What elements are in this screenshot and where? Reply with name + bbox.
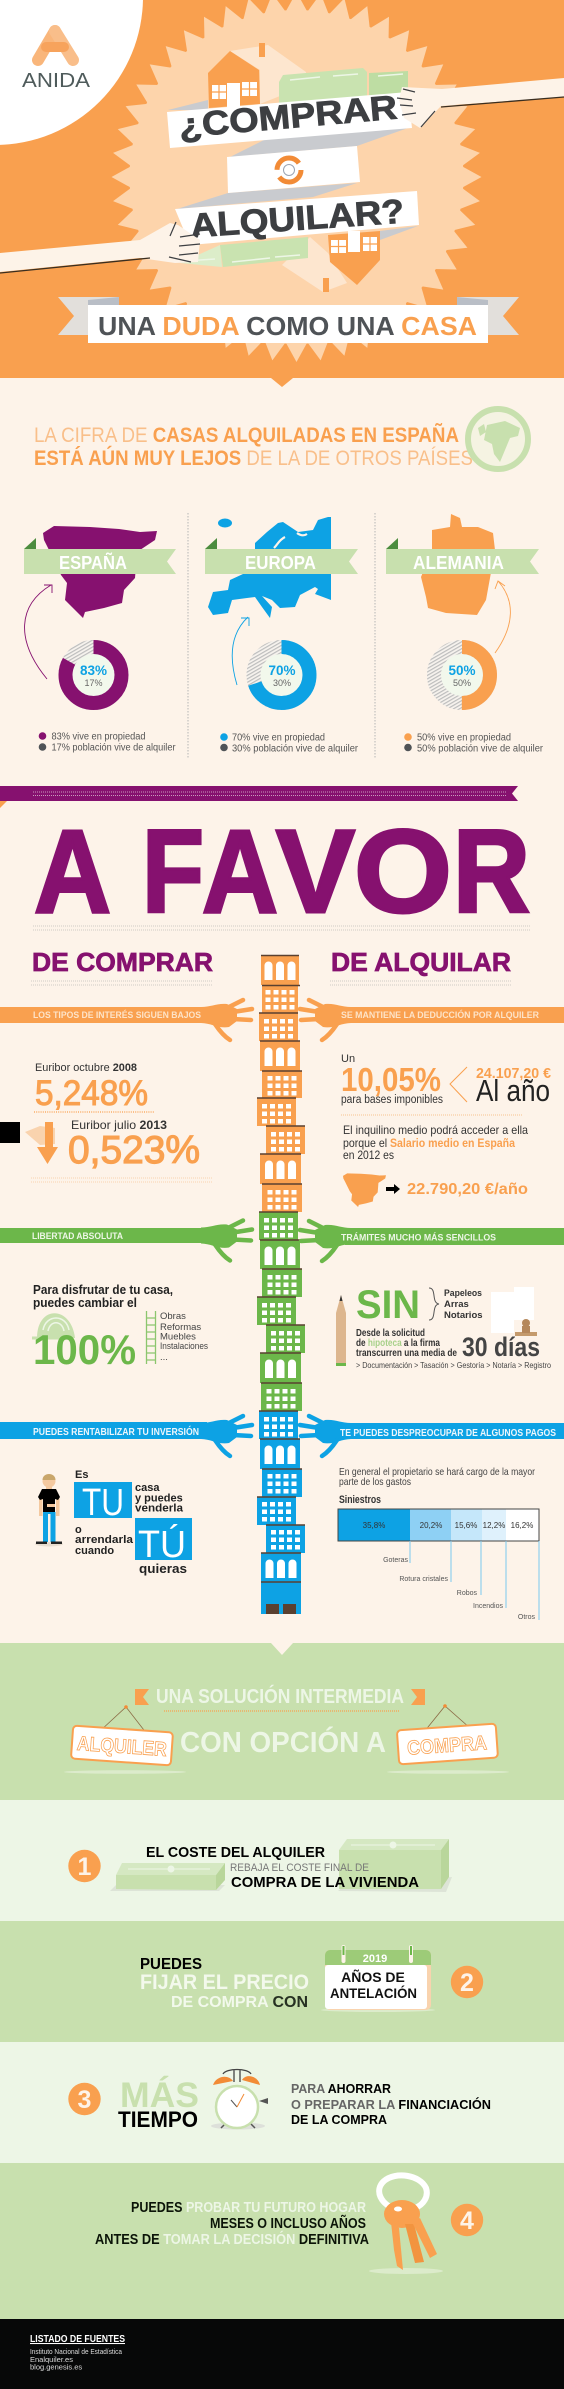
panel: paso 4 — [0, 2163, 564, 2319]
heading: con opción a: CON OPCIÓN A — [180, 1725, 386, 1759]
list: obras: Reformas — [160, 1322, 201, 1333]
heading: LA CIFRA DE CASAS ALQUILADAS EN ESPAÑA — [34, 424, 459, 447]
icon: lower house — [282, 231, 380, 292]
band: los tipos de interés — [0, 1000, 252, 1040]
icon: calendar — [321, 1946, 435, 2012]
icon: keys — [369, 2175, 443, 2274]
icon: brace — [429, 1288, 439, 1320]
tower: green floors — [257, 1212, 305, 1411]
list: obras: Muebles — [160, 1332, 196, 1342]
text: o arrendarla cuando: cuando — [75, 1545, 114, 1557]
logo: Anida — [0, 0, 143, 145]
panel: hero header — [0, 0, 564, 387]
band: se mantiene la deducción — [300, 1000, 564, 1040]
donut chart: España — [66, 647, 122, 703]
ribbon: Europa — [205, 538, 358, 574]
title: V — [276, 806, 355, 938]
sign: compra: COMPRA — [406, 1732, 488, 1760]
text: rebaja: REBAJA EL COSTE FINAL DE — [230, 1862, 369, 1874]
band: libertad absoluta — [0, 1220, 252, 1260]
figure: 5,248%: 5,248% — [35, 1074, 148, 1113]
ribbon: Europa: EUROPA — [245, 553, 316, 573]
legend: Alemania — [404, 732, 544, 754]
panel: comparison by country — [24, 409, 544, 758]
figure: 0,523%: 0,523% — [68, 1129, 200, 1172]
stacked bar chart: 35,8% — [363, 1521, 385, 1530]
text: sources: Enalquiler.es — [30, 2355, 73, 2364]
banner: alquilar: ALQUILAR? — [189, 193, 405, 245]
title — [34, 806, 530, 938]
text: puedes fijar el precio: FIJAR EL PRECIO — [140, 1971, 309, 1994]
banner: swap icon — [227, 146, 360, 193]
icon: globe — [468, 409, 528, 469]
starburst background — [112, 0, 482, 362]
list: papeleos — [444, 1288, 483, 1321]
text: o arrendarla cuando — [75, 1524, 134, 1557]
sign: alquiler: ALQUILER — [76, 1733, 168, 1761]
text: casa y puedes venderla: venderla — [135, 1502, 184, 1514]
legend: España: 17% población vive de alquiler — [52, 742, 176, 754]
illustration: right hand — [397, 78, 564, 128]
text: más: MÁS — [120, 2075, 199, 2115]
heading — [34, 424, 473, 470]
panel: deducción — [341, 1053, 552, 1207]
logo: Anida: ANIDA — [22, 70, 91, 92]
legend: Europa — [220, 732, 359, 754]
stacked bar chart: 12,2% — [483, 1521, 505, 1530]
text: es: Es — [75, 1469, 88, 1481]
donut chart: Alemania: 50% — [448, 663, 476, 678]
donut chart: Alemania: 50% — [453, 678, 471, 688]
stacked bar chart: Goteras — [383, 1557, 408, 1564]
heading: ESTÁ AÚN MUY LEJOS DE LA DE OTROS PAÍSES — [34, 446, 473, 470]
text: para disfrutar: Para disfrutar de tu casa, — [33, 1282, 173, 1297]
text: puedes fijar el precio: DE COMPRA CON — [171, 1994, 308, 2011]
text: sin: SIN — [356, 1283, 420, 1327]
text: quieras: quieras — [139, 1561, 187, 1576]
box: tu: TU — [82, 1482, 124, 1524]
icon: calendar: ANTELACIÓN — [330, 1984, 417, 2001]
band: despreocupar — [300, 1416, 564, 1456]
text: para ahorrar: O PREPARAR LA FINANCIACIÓN — [291, 2097, 491, 2112]
text: para disfrutar — [33, 1282, 173, 1310]
text: desde la solicitud — [356, 1328, 457, 1359]
icon: upper house — [208, 43, 306, 108]
arrow: España — [25, 585, 52, 679]
text: para ahorrar — [291, 2081, 491, 2127]
map: España — [43, 526, 157, 618]
text: puedes probar: MESES O INCLUSO AÑOS — [210, 2214, 366, 2232]
band: trámites: TRÁMITES MUCHO MÁS SENCILLOS — [341, 1232, 496, 1244]
panel: a favor heading — [0, 786, 530, 985]
text: sources: blog.genesis.es — [30, 2362, 82, 2372]
number badge: 3 — [68, 2083, 101, 2115]
list: papeleos: Notarios — [444, 1310, 483, 1321]
number badge: 2: 2 — [460, 1969, 474, 1997]
figure: 100%: 100% — [33, 1326, 136, 1373]
text: casa y puedes venderla: casa — [135, 1482, 160, 1494]
map: Europa — [208, 517, 331, 618]
title: R — [453, 806, 530, 938]
stacked bar chart: Incendios — [473, 1603, 503, 1610]
stacked bar chart: Rotura cristales — [399, 1576, 448, 1583]
icon: mini Spain map — [343, 1173, 386, 1207]
stacked bar chart: Robos — [457, 1590, 478, 1597]
tower: orange floors — [257, 955, 305, 1212]
subtitle ribbon: UNA DUDA COMO UNA CASA — [98, 311, 477, 341]
text: para bases imponibles: para bases imponibles — [341, 1094, 443, 1106]
number badge: 2 — [451, 1966, 483, 1998]
band: trámites — [300, 1221, 564, 1261]
icon: calendar: AÑOS DE — [341, 1968, 405, 1985]
stacked bar chart: Otros — [518, 1614, 535, 1621]
title: A — [34, 806, 111, 938]
figure: salario medio: 22.790,20 €/año — [407, 1181, 528, 1198]
legend: Alemania: 50% vive en propiedad — [417, 732, 511, 744]
list: obras — [160, 1311, 208, 1363]
text: desde la solicitud: de hipoteca a la firma — [356, 1338, 440, 1349]
heading: listado de fuentes: LISTADO DE FUENTES — [30, 2333, 125, 2345]
text: compra de la vivienda: COMPRA DE LA VIVIENDA — [231, 1874, 419, 1891]
icon: ladder — [146, 1311, 156, 1364]
stacked bar chart: 20,2% — [420, 1521, 442, 1530]
icon: papers and stamp — [491, 1287, 537, 1336]
figure: 10,05%: 10,05% — [341, 1061, 441, 1098]
text: para disfrutar: puedes cambiar el — [33, 1295, 137, 1310]
icon: arrow — [386, 1184, 400, 1194]
text: puedes probar: ANTES DE TOMAR LA DECISIÓN DEFINITIVA — [95, 2230, 369, 2248]
figure: 24.107,20 €: 24.107,20 € — [476, 1065, 552, 1082]
text: puedes fijar el precio: PUEDES — [140, 1956, 202, 1973]
map: Alemania — [421, 514, 495, 615]
text: propietario: parte de los gastos — [339, 1476, 411, 1488]
title: A — [202, 806, 278, 938]
title: O — [354, 806, 452, 938]
ribbon: España: ESPAÑA — [59, 552, 127, 573]
text: euribor 2013: Euribor julio 2013 — [71, 1118, 167, 1132]
icon: less-than sign — [450, 1067, 467, 1102]
band: puedes rentabilizar — [0, 1416, 252, 1456]
list: papeleos: Arras — [444, 1299, 469, 1310]
illustration: tower of floors — [257, 955, 305, 1614]
sign: compra — [387, 1704, 509, 1774]
ribbon: Alemania: ALEMANIA — [413, 553, 504, 573]
text: casa y puedes venderla — [135, 1482, 184, 1514]
heading: una solución intermedia: UNA SOLUCIÓN INTERMEDIA — [156, 1684, 404, 1708]
number badge: 1: 1 — [78, 1853, 92, 1881]
icon: small money stack — [110, 1863, 225, 1891]
text: para ahorrar: DE LA COMPRA — [291, 2112, 388, 2127]
stacked bar chart: 15,6% — [455, 1521, 477, 1530]
text: euribor 2008: Euribor octubre 2008 — [35, 1062, 137, 1074]
donut chart: España: 17% — [84, 678, 103, 688]
text: inquilino medio — [343, 1123, 528, 1162]
ribbon folds — [168, 100, 418, 240]
icon: hand with falling arrow — [0, 1122, 58, 1164]
legend: España: 83% vive en propiedad — [52, 732, 146, 742]
panel: libertad — [32, 1282, 208, 1373]
icon: tall money stack — [338, 1839, 452, 1892]
text: o arrendarla cuando: arrendarla — [75, 1534, 134, 1546]
text: inquilino medio: El inquilino medio podrá acceder a ella — [343, 1123, 528, 1137]
icon: left flag — [135, 1689, 149, 1705]
donut chart: Europa: 30% — [273, 678, 291, 688]
figure: 30 días: 30 días — [462, 1332, 540, 1362]
icon: upper banknotes — [279, 68, 408, 104]
icon: right flag — [411, 1689, 425, 1705]
text: inquilino medio: porque el Salario medio en España — [343, 1136, 515, 1150]
text: sources — [30, 2347, 123, 2372]
text: desde la solicitud: transcurren una media de — [356, 1348, 457, 1359]
ribbon: España — [24, 538, 176, 574]
stacked bar chart — [338, 1509, 539, 1621]
band: puedes rentabilizar: PUEDES RENTABILIZAR TU INVERSIÓN — [33, 1425, 199, 1438]
icon: pencil — [336, 1295, 346, 1366]
text: casa y puedes venderla: y puedes — [135, 1492, 183, 1504]
panel: trámites sencillos — [336, 1283, 551, 1370]
donut chart: Alemania — [434, 647, 490, 703]
icon: lower banknotes — [180, 237, 308, 267]
text: al año: Al año — [476, 1073, 550, 1108]
arrow: Europa — [232, 617, 249, 685]
text: tiempo: TIEMPO — [118, 2107, 198, 2132]
arrow: Alemania — [495, 581, 510, 653]
banner: comprar: ¿COMPRAR — [177, 89, 399, 146]
band: los tipos de interés: LOS TIPOS DE INTERÉS SIGUEN BAJOS — [33, 1010, 201, 1021]
band: libertad absoluta: LIBERTAD ABSOLUTA — [32, 1231, 123, 1242]
illustration: left hand — [0, 222, 200, 273]
heading: siniestros: Siniestros — [339, 1494, 381, 1506]
list: obras: Obras — [160, 1311, 186, 1322]
panel: footer sources — [0, 2319, 564, 2389]
tower: blue floors — [257, 1411, 305, 1614]
sign: alquiler — [64, 1705, 186, 1774]
number badge: 4 — [451, 2204, 483, 2236]
heading: de comprar: DE COMPRAR — [32, 947, 213, 977]
box: tú: TÚ — [138, 1523, 186, 1566]
list: obras: ... — [160, 1352, 168, 1363]
legend: España — [39, 732, 176, 754]
donut chart: Europa — [254, 647, 310, 703]
number badge: 4: 4 — [460, 2207, 474, 2235]
text: un: Un — [341, 1053, 355, 1065]
donut chart: España: 83% — [80, 663, 107, 678]
subtitle ribbon — [58, 297, 519, 343]
icon: helmet — [32, 1313, 75, 1338]
number badge: 1 — [68, 1850, 101, 1882]
number badge: 3: 3 — [78, 2086, 91, 2114]
list: obras: Instalaciones — [160, 1341, 208, 1352]
donut chart: Europa: 70% — [268, 663, 296, 678]
panel: euribor — [0, 1062, 212, 1182]
ribbon: Alemania — [386, 538, 539, 574]
panel: paso 1 — [0, 1800, 564, 1921]
panel: paso 2 — [0, 1921, 564, 2042]
legend: Alemania: 50% población vive de alquiler — [417, 744, 544, 754]
text: o arrendarla cuando: o — [75, 1524, 82, 1536]
text: el coste del alquiler: EL COSTE DEL ALQUILER — [146, 1844, 325, 1861]
panel: rentabilizar — [35, 1469, 192, 1576]
title: F — [142, 806, 204, 938]
panel: paso 3 — [0, 2042, 564, 2163]
panel: siniestros — [338, 1466, 539, 1621]
text: sources: Instituto Nacional de Estadística — [30, 2347, 123, 2356]
icon: alarm clock — [211, 2070, 268, 2130]
legend: Europa: 70% vive en propiedad — [232, 732, 325, 744]
text: para ahorrar: PARA AHORRAR — [291, 2081, 392, 2096]
panel: una solución intermedia — [0, 1643, 564, 1800]
text: desde la solicitud: Desde la solicitud — [356, 1328, 425, 1339]
text: propietario — [339, 1466, 535, 1488]
list: papeleos: Papeleos — [444, 1288, 482, 1299]
icon: calendar: 2019 — [363, 1953, 387, 1965]
text: puedes fijar el precio — [140, 1956, 309, 2011]
icon: person — [35, 1474, 63, 1546]
text: puedes probar — [95, 2200, 369, 2248]
band: se mantiene la deducción: SE MANTIENE LA DEDUCCIÓN POR ALQUILER — [341, 1009, 539, 1021]
text: puedes probar: PUEDES PROBAR TU FUTURO HOGAR — [131, 2200, 366, 2216]
legend: Europa: 30% población vive de alquiler — [232, 744, 359, 754]
heading: de alquilar: DE ALQUILAR — [331, 947, 511, 977]
text: inquilino medio: en 2012 es — [343, 1148, 394, 1162]
stacked bar chart: 16,2% — [511, 1521, 533, 1530]
